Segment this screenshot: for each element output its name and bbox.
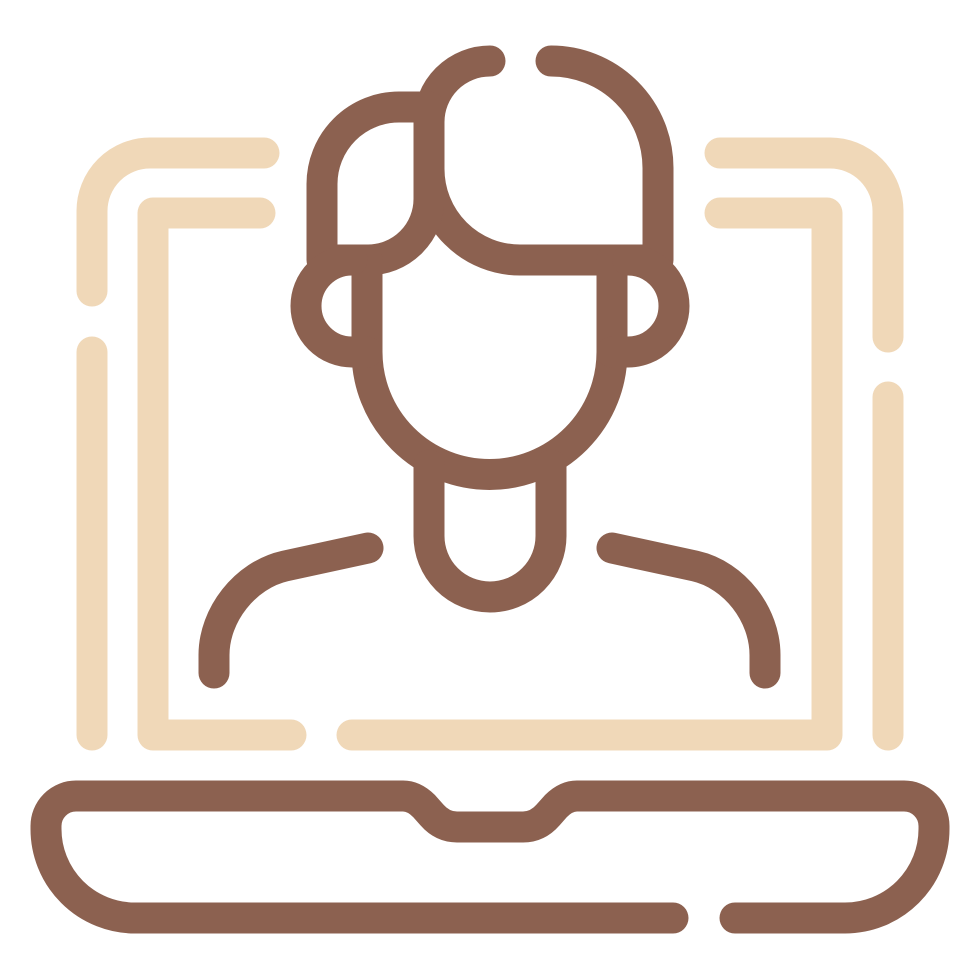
person: head, hair, ears, neck and shoulders <box>214 61 765 673</box>
laptop lid: tan outline <box>92 153 888 735</box>
laptop base <box>46 796 934 918</box>
